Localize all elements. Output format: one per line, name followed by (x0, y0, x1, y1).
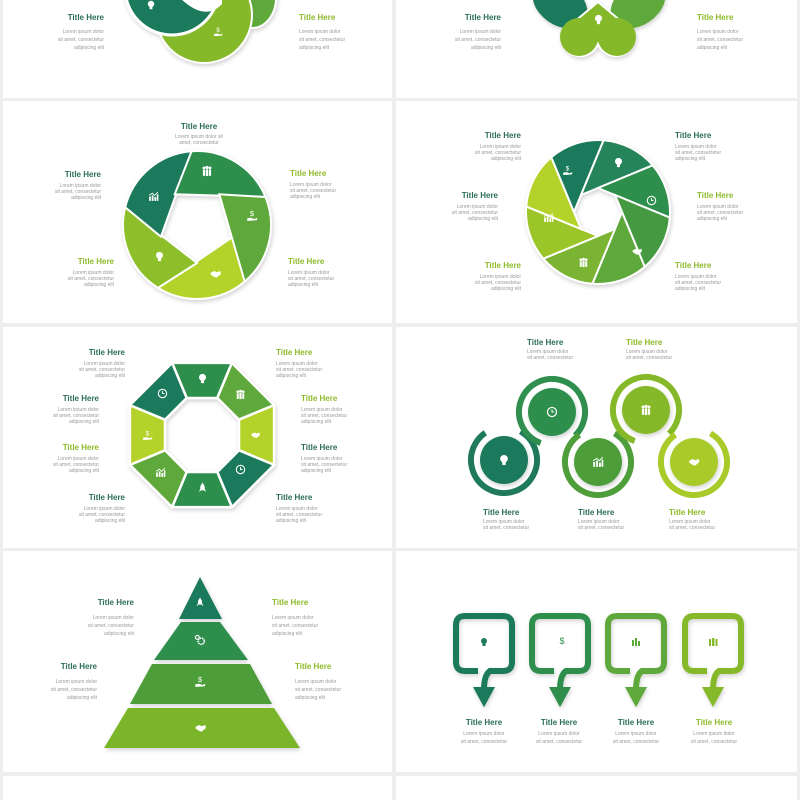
text block: right: sit amet, consectetur (299, 37, 345, 43)
text block: left: Lorem ipsum dolor (460, 29, 501, 35)
panel: octagon (3, 327, 392, 548)
text blocks: Title Here (288, 257, 325, 266)
text blocks: sit amet, consectetur (295, 687, 341, 693)
text blocks: sit amet, consectetur (536, 739, 582, 745)
text blocks: Lorem ipsum dolor (58, 407, 99, 413)
panel: callout boxes (396, 551, 797, 772)
text blocks: Title Here (89, 348, 126, 357)
chart: rings (459, 368, 739, 507)
text blocks: Title Here (272, 598, 309, 607)
icon: bulb (148, 1, 154, 9)
icons (143, 374, 260, 492)
panel: swirl (396, 101, 797, 323)
text blocks: adipiscing elit (697, 216, 728, 222)
text blocks: sit amet, consectetur (79, 512, 125, 518)
text block: left (58, 13, 105, 51)
text blocks: Title Here (541, 718, 578, 727)
text block: right: Title Here (697, 13, 734, 22)
text blocks: sit amet, consectetur (578, 525, 624, 531)
text blocks: Lorem ipsum dolor (669, 519, 711, 525)
text blocks (461, 718, 737, 745)
icons (500, 405, 699, 467)
text blocks: Title Here (276, 493, 313, 502)
panel: pyramid (3, 551, 392, 772)
text blocks: sit amet, consectetur (527, 355, 573, 361)
text blocks: adipiscing elit (468, 216, 499, 222)
icons (149, 166, 257, 278)
text blocks: sit amet, consectetur (290, 188, 336, 194)
text blocks: adipiscing elit (301, 468, 332, 474)
text blocks: Title Here (63, 443, 100, 452)
text blocks: Lorem ipsum dolor (290, 182, 332, 188)
text blocks: sit amet, consectetur (276, 367, 322, 373)
text blocks: Lorem ipsum dolor (276, 361, 318, 367)
text blocks: adipiscing elit (69, 419, 100, 425)
text blocks: sit amet, consectetur (697, 210, 743, 216)
text blocks (483, 338, 715, 531)
text blocks: Lorem ipsum dolor (84, 506, 125, 512)
text blocks: sit amet, consectetur (675, 150, 721, 156)
text blocks: Lorem ipsum dolor (538, 731, 580, 737)
text blocks: sit amet, consectetur (79, 367, 125, 373)
text blocks: Title Here (626, 338, 663, 347)
text block: right: Lorem ipsum dolor (697, 29, 739, 35)
text blocks: Title Here (697, 191, 734, 200)
icons (544, 158, 656, 267)
text blocks: sit amet, consectetur (669, 525, 715, 531)
text blocks: sit amet, consectetur (55, 189, 101, 195)
text blocks: sit amet, consectetur (483, 525, 529, 531)
chart: shutter blades (123, 151, 271, 299)
text blocks: adipiscing elit (104, 631, 135, 637)
text blocks: sit amet, consectetur (276, 512, 322, 518)
text blocks: Title Here (98, 598, 135, 607)
text blocks: Lorem ipsum dolor (527, 349, 569, 355)
text blocks: Title Here (462, 191, 499, 200)
text block: left: Title Here (465, 13, 502, 22)
text blocks: Lorem ipsum dolor (295, 679, 337, 685)
text blocks: sit amet, consectetur (301, 462, 347, 468)
text blocks: Lorem ipsum dolor (697, 204, 739, 210)
text blocks: Title Here (527, 338, 564, 347)
chart: octagon segments (130, 363, 274, 507)
text blocks: Title Here (485, 131, 522, 140)
text blocks: Title Here (466, 718, 503, 727)
text blocks: sit amet, consectetur (461, 739, 507, 745)
text blocks: adipiscing elit (71, 195, 102, 201)
icon: hand dollar (214, 28, 222, 36)
text block: left (455, 13, 502, 51)
text blocks: Lorem ipsum dolor (578, 519, 620, 525)
text blocks: sit amet, consectetur (691, 739, 737, 745)
text blocks: Lorem ipsum dolor (60, 183, 101, 189)
text blocks: Lorem ipsum dolor (693, 731, 735, 737)
text blocks (55, 122, 336, 288)
icons (195, 598, 206, 732)
text blocks: sit amet, consectetur (301, 413, 347, 419)
text blocks: Title Here (89, 493, 126, 502)
text blocks: Title Here (618, 718, 655, 727)
text blocks: amet, consectetur (179, 140, 219, 146)
text blocks: Title Here (578, 508, 615, 517)
text block: right (697, 13, 743, 51)
text blocks: sit amet, consectetur (272, 623, 318, 629)
text blocks: sit amet, consectetur (452, 210, 498, 216)
chart: pyramid tiers (104, 577, 300, 748)
panel: top-left (row 1) (3, 0, 392, 98)
text blocks: Lorem ipsum dolor (463, 731, 505, 737)
text blocks: adipiscing elit (95, 373, 126, 379)
text blocks: adipiscing elit (675, 156, 706, 162)
text blocks: Title Here (301, 443, 338, 452)
chart: swirl blades (526, 140, 670, 284)
text blocks: Lorem ipsum dolor (675, 144, 717, 150)
text blocks: Title Here (675, 131, 712, 140)
text blocks (53, 348, 347, 524)
text block: left: Lorem ipsum dolor (63, 29, 104, 35)
text blocks: sit amet, consectetur (51, 687, 97, 693)
text blocks: adipiscing elit (95, 518, 126, 524)
text blocks: adipiscing elit (491, 156, 522, 162)
text block: right: adipiscing elit (299, 45, 330, 51)
icons (481, 636, 718, 646)
text blocks: Lorem ipsum dolor (480, 274, 521, 280)
text block: right (299, 13, 345, 51)
text block: left: Title Here (68, 13, 105, 22)
text block: left: sit amet, consectetur (58, 37, 104, 43)
text blocks: Lorem ipsum dolor (276, 506, 318, 512)
text blocks: adipiscing elit (84, 282, 115, 288)
text block: right: Lorem ipsum dolor (299, 29, 341, 35)
text blocks: Lorem ipsum dolor (301, 407, 343, 413)
text blocks: Title Here (301, 394, 338, 403)
chart: four callout boxes with arrows (456, 616, 741, 701)
text blocks: adipiscing elit (675, 286, 706, 292)
text blocks: Lorem ipsum dolor (626, 349, 668, 355)
text blocks: Lorem ipsum dolor (675, 274, 717, 280)
text blocks: sit amet, consectetur (675, 280, 721, 286)
text blocks: Title Here (669, 508, 706, 517)
text blocks: Title Here (78, 257, 115, 266)
text blocks: adipiscing elit (272, 631, 303, 637)
text blocks: adipiscing elit (69, 468, 100, 474)
text blocks (452, 131, 743, 292)
text blocks: Title Here (63, 394, 100, 403)
text blocks: Title Here (290, 169, 327, 178)
text blocks: Title Here (276, 348, 313, 357)
text blocks: adipiscing elit (276, 373, 307, 379)
shape: hearts (523, 0, 675, 56)
text blocks: Lorem ipsum dolor (301, 456, 343, 462)
text blocks: Lorem ipsum dolor (480, 144, 521, 150)
text blocks: sit amet, consectetur (288, 276, 334, 282)
icons: $ (559, 636, 565, 646)
text block: left: sit amet, consectetur (455, 37, 501, 43)
text blocks: adipiscing elit (67, 695, 98, 701)
text blocks: Lorem ipsum dolor (58, 456, 99, 462)
text blocks: Title Here (295, 662, 332, 671)
text blocks: adipiscing elit (301, 419, 332, 425)
text blocks: sit amet, consectetur (53, 462, 99, 468)
text blocks (51, 598, 341, 701)
text block: right: sit amet, consectetur (697, 37, 743, 43)
text blocks: adipiscing elit (288, 282, 319, 288)
text blocks: Lorem ipsum dolor (73, 270, 114, 276)
text blocks: Title Here (61, 662, 98, 671)
panel: top-right (row 1) (396, 0, 797, 98)
text block: right: Title Here (299, 13, 336, 22)
text blocks: adipiscing elit (491, 286, 522, 292)
text blocks: sit amet, consectetur (53, 413, 99, 419)
shape: overlapping leaves (125, 0, 276, 63)
text blocks: Title Here (181, 122, 218, 131)
text blocks: sit amet, consectetur (68, 276, 114, 282)
text blocks: sit amet, consectetur (88, 623, 134, 629)
panel: shutter pentagon (3, 101, 392, 323)
text blocks: adipiscing elit (290, 194, 321, 200)
text blocks: adipiscing elit (276, 518, 307, 524)
panel: bottom row partial (3, 776, 797, 800)
text blocks: adipiscing elit (295, 695, 326, 701)
panel: rings wave (396, 327, 797, 548)
text blocks: Lorem ipsum dolor (483, 519, 525, 525)
text blocks: Title Here (65, 170, 102, 179)
text blocks: sit amet, consectetur (613, 739, 659, 745)
text blocks: Lorem ipsum dolor (93, 615, 134, 621)
text blocks: Lorem ipsum dolor (288, 270, 330, 276)
text blocks: sit amet, consectetur (626, 355, 672, 361)
text blocks: Title Here (483, 508, 520, 517)
chart: filled circles (480, 386, 718, 486)
text block: left: adipiscing elit (471, 45, 502, 51)
text blocks: Lorem ipsum dolor (615, 731, 657, 737)
text blocks: Title Here (675, 261, 712, 270)
text blocks: Lorem ipsum dolor sit (175, 134, 224, 140)
text block: left: adipiscing elit (74, 45, 105, 51)
text blocks: Lorem ipsum dolor (84, 361, 125, 367)
text blocks: sit amet, consectetur (475, 150, 521, 156)
text blocks: Lorem ipsum dolor (56, 679, 97, 685)
text blocks: Title Here (485, 261, 522, 270)
text blocks: Lorem ipsum dolor (457, 204, 498, 210)
icon: bulb (595, 15, 602, 24)
text blocks: Title Here (696, 718, 733, 727)
text blocks: Lorem ipsum dolor (272, 615, 314, 621)
text block: right: adipiscing elit (697, 45, 728, 51)
text blocks: sit amet, consectetur (475, 280, 521, 286)
